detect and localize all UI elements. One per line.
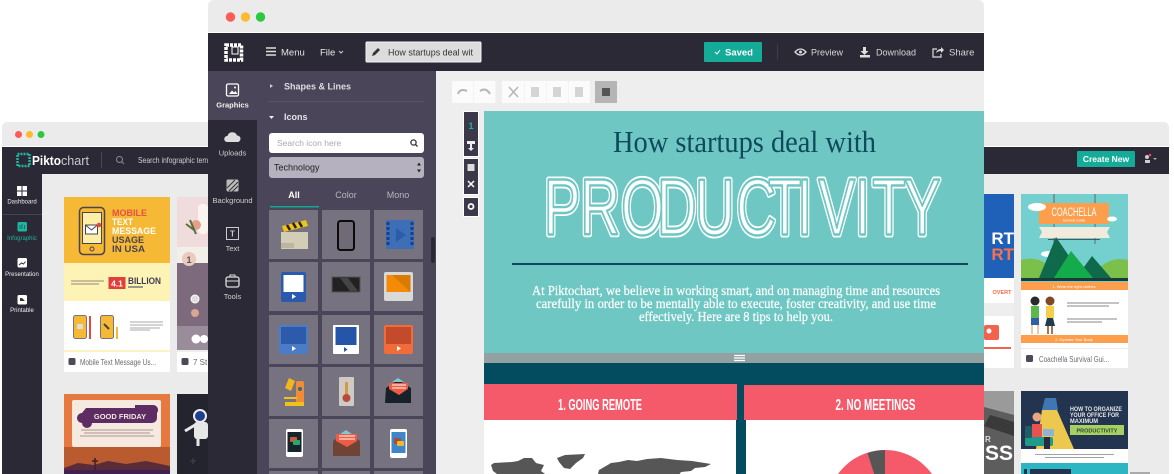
panel: going remote: 1. GOING REMOTE: [558, 397, 642, 414]
intro paragraph: At Piktochart, we believe in working smart, and on managing time and resources: [532, 283, 940, 298]
two people: [1030, 296, 1055, 334]
icons row: [269, 114, 308, 120]
card: coachella: [1021, 194, 1128, 368]
icon: microscope: [284, 378, 304, 406]
editor tool sidebar: [208, 71, 257, 474]
card: seven steps: 7 St: [193, 358, 208, 367]
card: seven steps: [177, 197, 208, 372]
intro paragraph: carefully in order to be mentally able to execute, foster creativity, and use time: [536, 296, 936, 311]
card: mobile text message usage: [64, 197, 170, 372]
document title field: [366, 42, 481, 62]
intro paragraph: [532, 283, 940, 324]
preview: Preview: [811, 48, 843, 58]
small phones: [74, 316, 163, 339]
section background: [484, 363, 984, 474]
section divider handle: [484, 353, 984, 363]
category select: [269, 157, 424, 178]
front window: editor: [208, 0, 984, 474]
icon: tools: [226, 275, 239, 287]
icon: brown envelope: [333, 430, 360, 456]
icon: chat phone: [286, 429, 303, 457]
icons row: Icons: [284, 112, 308, 122]
card: coachella: 2. Hydrate Your Body: [1055, 337, 1093, 342]
icon: phone: [338, 221, 354, 250]
dashboard window buttons: [15, 131, 44, 138]
card: mobile text message usage: TEXT: [112, 217, 133, 227]
icon: thermometer: [339, 377, 354, 406]
card: mobile text message usage: MOBILE: [112, 208, 147, 218]
dashboard top bar: Search infographic tem: [138, 156, 208, 165]
icon: film: [386, 220, 414, 249]
card: good friday: GOOD FRIDAY: [94, 412, 146, 421]
share: Share: [949, 48, 974, 58]
icon: blue player: [281, 272, 306, 302]
card: good friday: [64, 394, 170, 474]
editor tool sidebar: Background: [212, 196, 253, 205]
scrollbar: [431, 237, 435, 263]
icon: graphics: [226, 84, 238, 96]
category select: Technology: [274, 162, 320, 172]
coachella banner: COACHELLA: [1052, 207, 1097, 219]
editor tool sidebar: Text: [226, 244, 240, 253]
dashboard sidebar: Presentation: [5, 272, 39, 278]
icon: logo: [226, 45, 242, 60]
shapes and lines row: Shapes & Lines: [284, 82, 351, 92]
card: laptop photo partial: R: [985, 435, 991, 444]
editor top bar: File: [320, 48, 335, 58]
icon: white framed screen: [333, 325, 359, 354]
coachella banner: Survival Guide: [1063, 218, 1085, 222]
card: laptop photo partial: [984, 391, 1014, 474]
panel: no meetings: [744, 385, 984, 474]
panel: going remote: [484, 384, 737, 474]
card: organize your office: YOUR OFFICE FOR: [1070, 413, 1120, 419]
card: mobile text message usage: MESSAGE: [112, 226, 156, 236]
slide tool strip: [464, 112, 478, 216]
icon search field: [269, 133, 424, 153]
editor tool sidebar: Uploads: [219, 148, 247, 158]
dashboard top bar: chart: [61, 153, 89, 168]
card: organize your office: PRODUCTIVITY: [1077, 428, 1118, 434]
icon: text: T: [230, 230, 235, 238]
dashboard top bar: Pikto: [32, 153, 61, 168]
dashboard top bar: [2, 147, 1169, 174]
icon tile grid: [269, 210, 423, 474]
tabs: Color: [335, 190, 357, 200]
canvas toolbar: [452, 81, 617, 103]
icon: background: [226, 180, 238, 192]
icon: uploads: [224, 132, 241, 142]
editor top bar: Menu: [281, 48, 305, 58]
icon: blue screen: [279, 325, 308, 354]
card: blue partial: RT: [991, 245, 1015, 264]
intro paragraph: effectively. Here are 8 tips to help you.: [639, 309, 833, 324]
card: seven steps: 1: [186, 255, 192, 265]
panel: no meetings: 2. NO MEETINGS: [836, 397, 916, 414]
editor tool sidebar: Tools: [224, 292, 242, 301]
tabs: Mono: [387, 190, 409, 200]
productivity outer outline: PRODUCTIVITY: [544, 162, 941, 252]
download: [860, 47, 916, 58]
share: [933, 47, 974, 58]
button: saved: [704, 42, 762, 62]
phone illustration: [80, 208, 104, 254]
card: blue partial: RT: [991, 229, 1015, 248]
mountains: [1021, 237, 1128, 278]
icon search field: Search icon here: [277, 138, 342, 148]
document title field: How startups deal wit: [388, 48, 473, 58]
infographic header panel: [484, 111, 984, 353]
editor title bar: [208, 12, 984, 33]
card: mobile text message usage: USAGE: [112, 235, 144, 245]
card: mobile text message usage: IN USA: [112, 244, 146, 254]
pie chart: [838, 450, 932, 474]
tabs: [270, 190, 409, 208]
card: organize your office: HOW TO ORGANIZE: [1070, 407, 1122, 413]
button: create new: [1077, 151, 1135, 167]
icon: menu: [266, 48, 276, 55]
icon: clapperboard: [281, 220, 308, 249]
back window: dashboard: [2, 122, 1169, 474]
card: mobile text message usage: Mobile Text Message Us...: [80, 358, 156, 367]
card: blue partial: OVERT: [993, 290, 1012, 296]
card: coachella: Coachella Survival Gui...: [1039, 355, 1109, 364]
tabs: All: [288, 190, 300, 200]
world map: [491, 454, 711, 474]
graphics panel: [257, 71, 436, 474]
icon: black screen: [332, 277, 360, 292]
card: coachella: 1. Wear the right clothes: [1052, 284, 1096, 289]
icon: orange screen: [384, 272, 413, 301]
button: create new: Create New: [1083, 154, 1130, 164]
card: mobile text message usage: BILLION: [128, 276, 161, 286]
card: mobile text message usage: 4.1: [111, 278, 123, 288]
editor top bar: [208, 33, 984, 71]
slide tool strip: 1: [468, 121, 474, 131]
icon: dark envelope: [385, 378, 411, 403]
dashboard sidebar: Infographic: [7, 236, 37, 242]
dashboard sidebar: Printable: [10, 308, 34, 314]
icon: red screen: [384, 325, 413, 354]
icon: blue chat phone: [390, 429, 407, 458]
card: laptop photo partial: SS: [985, 442, 1013, 465]
download: Download: [876, 48, 916, 58]
dashboard sidebar: [2, 174, 42, 474]
icon: text: [226, 228, 238, 240]
card: astronaut: [177, 394, 208, 474]
card: blue partial: [984, 194, 1015, 368]
productivity inner outline: PRODUCTIVITY: [544, 162, 941, 252]
card: organize your office: MAXIMUM: [1070, 419, 1098, 425]
coachella banner: [1039, 194, 1110, 244]
preview: [794, 48, 843, 56]
card: organize your office: [1021, 391, 1128, 474]
editor tool sidebar: Graphics: [216, 100, 249, 110]
dashboard sidebar: Dashboard: [7, 200, 37, 206]
title line: How startups deal with: [613, 124, 876, 159]
button: saved: Saved: [725, 48, 753, 58]
